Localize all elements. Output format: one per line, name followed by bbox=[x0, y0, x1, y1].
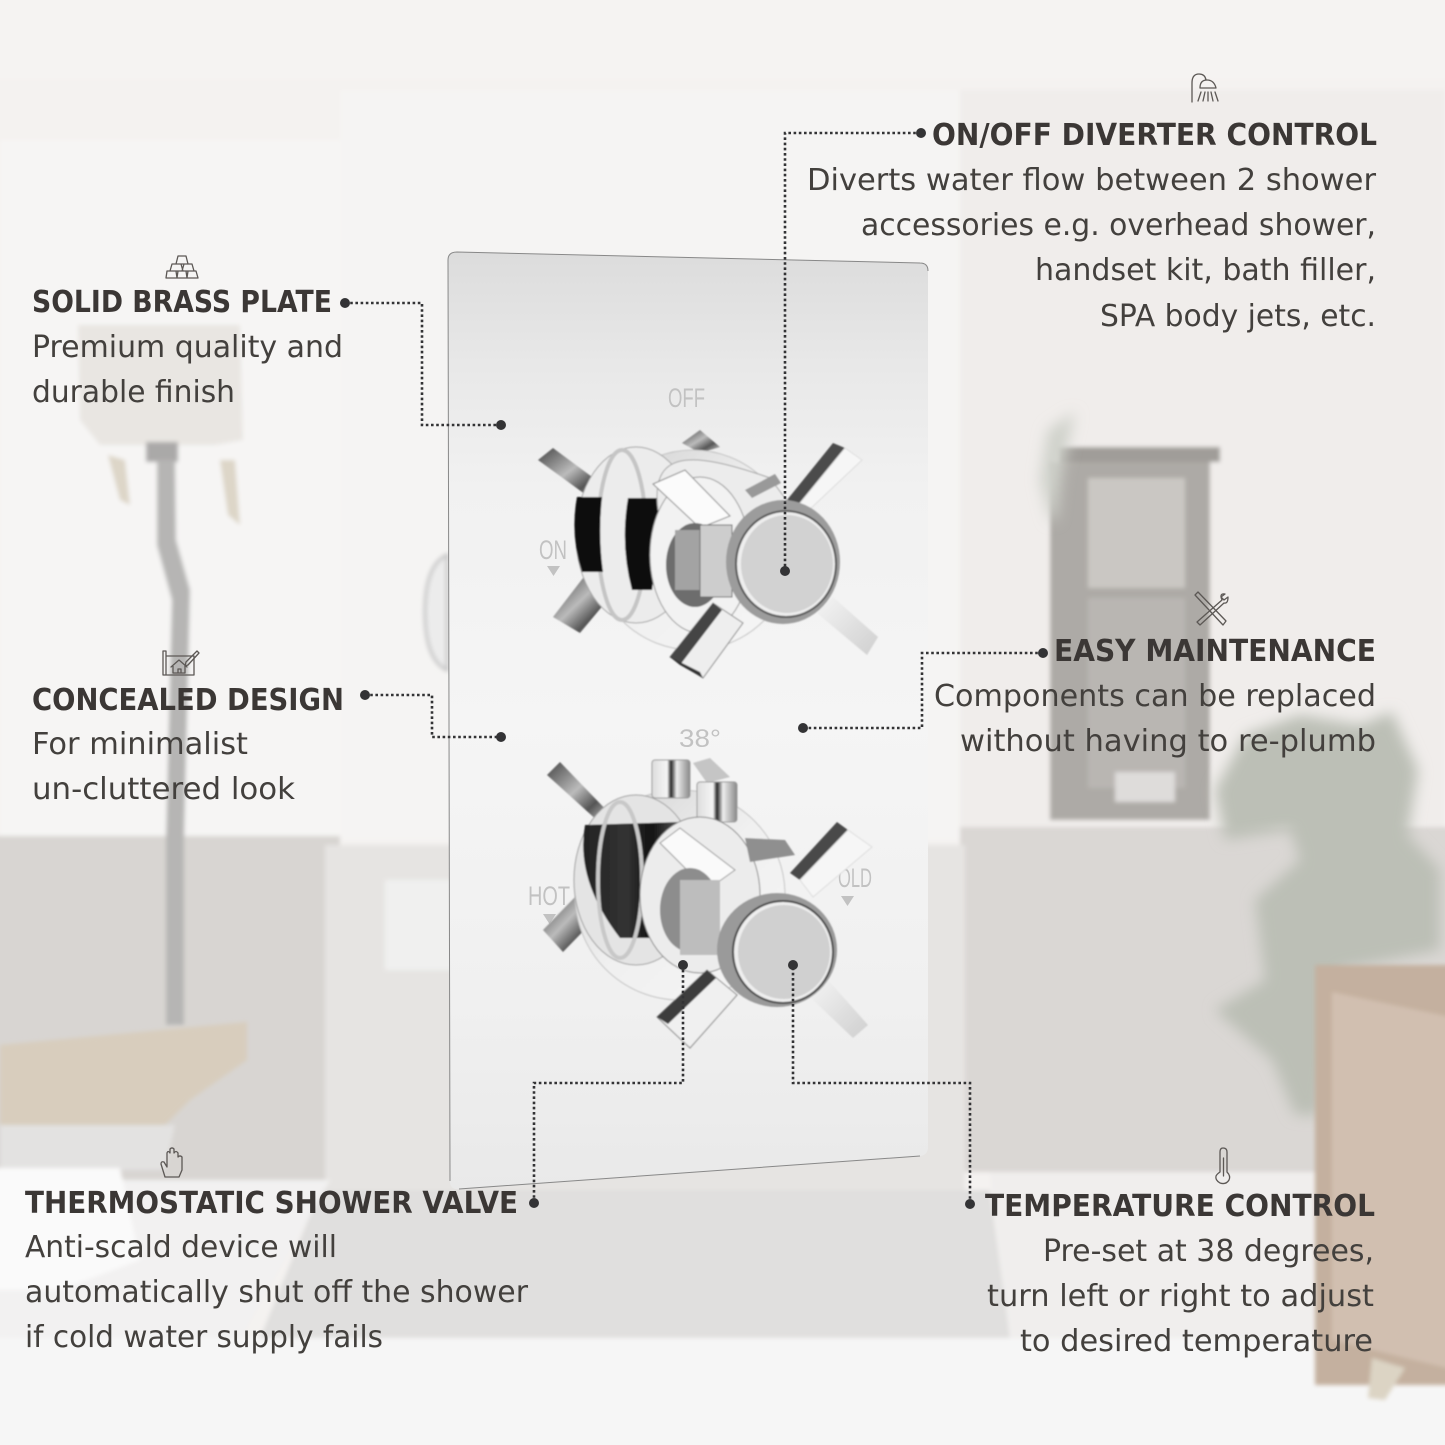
icon: house plan and pencil bbox=[163, 651, 199, 675]
text block: thermostatic shower valve: THERMOSTATIC SHOWER VALVE bbox=[25, 1186, 518, 1221]
text block: concealed design bbox=[32, 683, 344, 807]
leader: easy maintenance bbox=[798, 648, 1048, 733]
text block: concealed design: CONCEALED DESIGN bbox=[32, 683, 344, 718]
text block: on/off diverter control: SPA body jets, etc. bbox=[1100, 299, 1376, 334]
text block: solid brass plate: durable finish bbox=[32, 375, 235, 410]
plate markings: ON bbox=[539, 535, 567, 565]
text block: temperature control: Pre-set at 38 degrees, bbox=[1043, 1234, 1374, 1269]
wooden cabinet and toilet seat bbox=[0, 555, 1445, 1400]
plate markings: OFF bbox=[668, 383, 705, 413]
leader: solid brass plate bbox=[340, 298, 506, 430]
text block: concealed design: un-cluttered look bbox=[32, 772, 296, 807]
text block: solid brass plate: SOLID BRASS PLATE bbox=[32, 285, 332, 320]
icon: crossed tools bbox=[1195, 592, 1228, 625]
icon: thermometer bbox=[1216, 1148, 1230, 1184]
plate markings: OLD bbox=[838, 863, 872, 893]
text block: on/off diverter control bbox=[807, 118, 1377, 334]
leader: thermostatic shower valve bbox=[529, 960, 688, 1208]
leader: on/off diverter control bbox=[780, 128, 926, 576]
plate edge highlight bbox=[448, 252, 928, 1189]
icon: shower head bbox=[1192, 74, 1218, 102]
icon: brass ingot stack bbox=[166, 256, 198, 278]
text block: temperature control: TEMPERATURE CONTROL bbox=[985, 1189, 1375, 1224]
plate markings: 38° bbox=[679, 725, 721, 753]
text block: easy maintenance: EASY MAINTENANCE bbox=[1054, 634, 1376, 669]
plant and foliage bbox=[1040, 412, 1440, 1115]
text block: temperature control: turn left or right to adjust bbox=[987, 1279, 1374, 1314]
text block: on/off diverter control: handset kit, bath filler, bbox=[1035, 253, 1376, 288]
text block: easy maintenance: without having to re-plumb bbox=[960, 724, 1376, 759]
text block: on/off diverter control: accessories e.g. overhead shower, bbox=[861, 208, 1376, 243]
text block: concealed design: For minimalist bbox=[32, 727, 248, 762]
icon: open hand bbox=[161, 1148, 182, 1177]
leader: concealed design bbox=[360, 690, 506, 742]
text block: solid brass plate bbox=[32, 285, 343, 410]
text block: thermostatic shower valve bbox=[25, 1186, 529, 1355]
text block: thermostatic shower valve: automatically shut off the shower bbox=[25, 1275, 529, 1310]
text block: on/off diverter control: Diverts water flow between 2 shower bbox=[807, 163, 1377, 198]
lower temperature knob bbox=[543, 758, 872, 1048]
chrome plate bbox=[448, 252, 928, 1189]
text block: on/off diverter control: ON/OFF DIVERTER CONTROL bbox=[932, 118, 1377, 153]
plate markings bbox=[528, 383, 872, 924]
text block: temperature control bbox=[985, 1189, 1375, 1359]
text block: solid brass plate: Premium quality and bbox=[32, 330, 343, 365]
plate markings: HOT bbox=[528, 881, 570, 911]
text block: easy maintenance bbox=[934, 634, 1376, 759]
text block: easy maintenance: Components can be replaced bbox=[934, 679, 1376, 714]
upper diverter knob bbox=[538, 430, 878, 678]
text block: thermostatic shower valve: Anti-scald device will bbox=[25, 1230, 337, 1265]
text block: temperature control: to desired temperature bbox=[1020, 1324, 1373, 1359]
leader: temperature control bbox=[788, 960, 975, 1209]
text block: thermostatic shower valve: if cold water supply fails bbox=[25, 1320, 383, 1355]
